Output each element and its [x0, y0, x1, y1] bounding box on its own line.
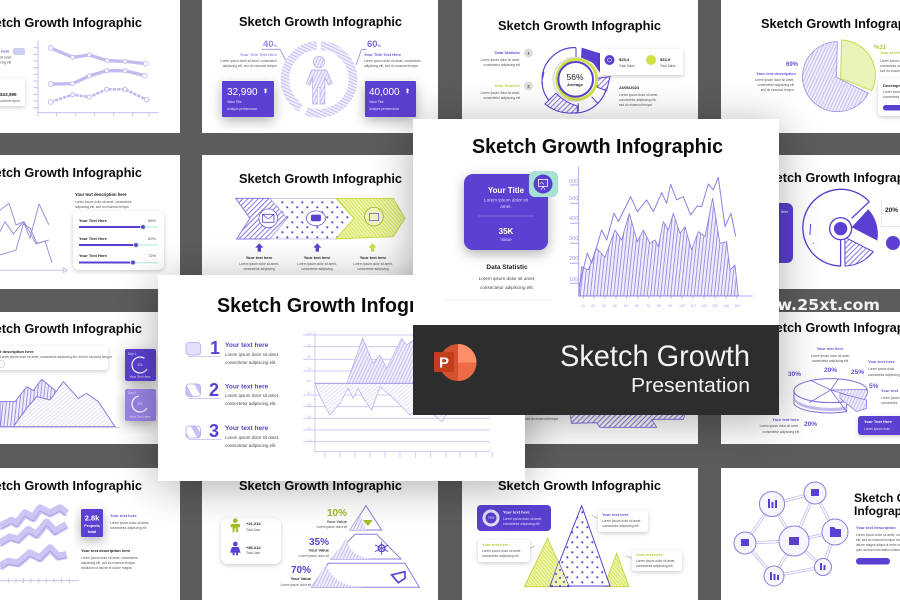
user card: +86,214: [246, 545, 261, 550]
item 2: [186, 380, 279, 406]
icon: powerpoint logo: [434, 344, 476, 381]
slide: 3d pie: Lorem ipsum dolor sit amet: [811, 354, 849, 358]
projects card: total: [88, 529, 96, 534]
slide: arrow chevrons: consectetur adipiscing: [301, 267, 333, 271]
stat card: [464, 174, 548, 250]
callout left: [478, 540, 530, 562]
slide: multi line sliders: [0, 155, 180, 289]
slide: person donut: Sketch Growth Infographic: [239, 14, 402, 29]
wave band chart: [0, 508, 78, 583]
slide: hero chart: 200: [569, 256, 578, 262]
slide: 3d pie: Lorem ipsum dolor sit amet,: [760, 424, 799, 428]
slider card: Your Text Here: [79, 236, 108, 241]
slide: line chart top left: $33,999: [0, 92, 17, 97]
slide: wave bands: Your text description here: [81, 548, 131, 553]
slide: pie chart top right: %31: [874, 45, 887, 51]
slide: pie chart top right: sed do eiusmod tempor: [761, 88, 795, 92]
slide: triangles: Sketch Growth Infographic: [498, 478, 661, 493]
slide: person donut: 40%: [263, 39, 278, 50]
stat card left: [222, 81, 274, 117]
slide: stacked area overlay: 50: [307, 390, 312, 395]
sales card: $33,9: [660, 57, 671, 62]
slide: person donut: adipiscing elit, sed do eiusmod tempor: [223, 64, 278, 68]
slide: 3d pie: consectetur adipiscing elit: [762, 430, 799, 434]
mountain area chart: [0, 379, 119, 427]
slide: pie chart top right: Lorem ipsum dolor sit amet,: [755, 78, 794, 82]
slide: right side wedge pie: [721, 155, 900, 289]
slide: pyramid: Your Value: [291, 576, 312, 581]
projects card: Projects: [84, 523, 101, 528]
slide: pyramid: 35%: [309, 537, 329, 548]
slide: hero chart: 10: [581, 304, 585, 308]
slide: multi line sliders: Lorem ipsum dolor sit amet, consectetur: [75, 200, 133, 204]
item 2: Lorem ipsum dolor sit amet,: [225, 393, 279, 398]
slide: 3d pie: 20%: [804, 421, 817, 428]
slide: average donut: Lorem ipsum dolor sit amet,: [481, 58, 520, 62]
slide: hero chart: 130: [712, 304, 718, 308]
triangles chart: [524, 506, 632, 587]
day card 1: Day 1: [128, 352, 137, 356]
slide: hero chart: 70: [646, 304, 650, 308]
purple callout: Lorem ipsum dolor sit amet: [503, 517, 542, 521]
stat card right: Analyze performance: [369, 107, 399, 111]
slide: 3d pie: consectetur: [881, 401, 898, 405]
slide: hero chart: [413, 119, 779, 325]
slide: arrow chevrons: Sketch Growth Infographic: [239, 171, 402, 186]
slide: arrow chevrons: Your text here: [360, 255, 387, 260]
slide: pie chart top right: [721, 0, 900, 133]
slide: hero chart: Data Statistic: [486, 264, 528, 271]
stat card: amet.: [500, 204, 512, 209]
hero area chart: [570, 167, 753, 299]
slide: wave bands: consectetur adipiscing elit: [110, 526, 147, 530]
day card 1: [125, 349, 156, 381]
user card: Total User: [246, 528, 261, 532]
slide: average donut: Sketch Growth Infographic: [498, 18, 661, 33]
slide: arrow chevrons: Your text here: [246, 255, 273, 260]
slide: hero chart: 600: [569, 179, 578, 185]
slide: average donut: 23/06/2024: [619, 85, 640, 90]
item 1: consectetur adipiscing elit.: [225, 360, 276, 365]
slide: 3d pie: Your text here: [772, 417, 800, 422]
stat card right: ⬆: [405, 88, 410, 95]
slide: stacked area overlay: 90: [307, 343, 312, 348]
slide: pie chart top right: 69%: [786, 62, 799, 68]
slide: average donut: Lorem ipsum dolor sit amet,: [619, 93, 658, 97]
slide: stacked area overlay: 100: [306, 331, 313, 336]
slide: line chart top left: [0, 0, 180, 133]
slide: wave bands: Your text here: [110, 513, 137, 518]
slide: hero chart: 120: [701, 304, 707, 308]
user card: +21,214: [246, 521, 261, 526]
item 1: Lorem ipsum dolor sit amet,: [225, 352, 279, 357]
slide: wave bands: Lorem ipsum dolor sit amet,: [110, 521, 149, 525]
day card 2: Your Text Here: [130, 415, 151, 419]
multi-line chart: [0, 203, 67, 273]
slide: 3d pie: Your text: [881, 388, 899, 393]
network diagram: [734, 482, 848, 586]
slide: average donut: consectetur adipiscing elit: [484, 63, 520, 67]
area chart: [303, 332, 492, 458]
slider card: 85%: [148, 218, 156, 223]
slide: wave bands: incididunt ut labore et dolore magna: [81, 566, 132, 570]
purple button card: Your Text Here: [864, 419, 893, 424]
slide: multi line sliders: adipiscing elit, sed do eiusmod tempor: [75, 205, 130, 209]
item 3: 3: [209, 421, 219, 441]
item 1: [186, 338, 279, 365]
slide: middle row hidden hatch chart: sed do eiusmod tempor: [525, 417, 559, 421]
slide: average donut: Average: [567, 82, 584, 87]
slide: arrow chevrons: Lorem ipsum dolor sit amet,: [353, 262, 393, 266]
slide: pie chart top right: consectetur adipiscing elit: [758, 83, 794, 87]
development card: [878, 78, 900, 116]
purple callout: Your text here: [503, 510, 530, 514]
sales card: Total Sales: [660, 64, 676, 68]
slider card: 60%: [148, 236, 156, 241]
band title: Sketch Growth: [560, 340, 750, 373]
slide: triangles: [462, 468, 698, 600]
slide: stacked area overlay: [158, 275, 525, 481]
stat card left: ⬆: [263, 88, 268, 95]
stat card right: 40,000: [369, 87, 400, 98]
callout left: consectetur adipiscing elit: [482, 554, 519, 558]
slide: right side wedge pie: 20%: [885, 207, 898, 214]
slide: hero chart: 30: [602, 304, 606, 308]
slide: average donut: [462, 0, 698, 133]
slide: 3d pie: Lorem ipsum: [881, 396, 900, 400]
callout right: Lorem ipsum dolor sit amet: [636, 559, 675, 563]
slide: 3d pie: Lorem ipsum dolor: [868, 367, 895, 371]
large title: Sketch Growth Infographic: [217, 295, 468, 317]
item 3: [186, 421, 279, 448]
slide: hero chart: 20: [591, 304, 595, 308]
slide: average donut: 1: [527, 50, 530, 56]
purple button card: Lorem ipsum dolor: [864, 427, 891, 431]
item 3: consectetur adipiscing elit.: [225, 443, 276, 448]
slide: average donut: consectetur adipiscing elit,: [619, 98, 656, 102]
slide: pyramid: 10%: [327, 508, 347, 519]
slide: arrow chevrons: Lorem ipsum dolor sit amet,: [297, 262, 337, 266]
wedge pie chart: [803, 189, 900, 266]
slide: average donut: sed do eiusmod tempor: [619, 103, 653, 107]
slide: 3d pie: Your text here: [868, 359, 895, 364]
item 2: 2: [209, 380, 219, 400]
slide: hero chart: 50: [624, 304, 628, 308]
slide: 3d pie: Your text here: [817, 346, 844, 351]
slide: hero chart: Lorem ipsum dolor sit amet,: [479, 276, 535, 281]
slide: hero chart: 80: [657, 304, 661, 308]
slide: stacked area overlay: 80: [307, 354, 312, 359]
person donut chart: [262, 45, 367, 113]
slide: multi line sliders: Your text description here: [75, 192, 127, 197]
slide: arrow chevrons: consectetur adipiscing: [243, 267, 275, 271]
slide: hero chart: 40: [613, 304, 617, 308]
slide: wave bands: adipiscing elit, sed do eiusmod tempor: [81, 561, 136, 565]
slide: person donut: Your Title Text Here: [364, 52, 402, 57]
stat card: 35K: [499, 227, 514, 236]
callout top right: Lorem ipsum dolor sit amet: [602, 519, 641, 523]
line chart: [33, 41, 158, 116]
stat card left: 32,990: [227, 87, 258, 98]
item 2: consectetur adipiscing elit.: [225, 401, 276, 406]
description card: Lorem ipsum dolor sit amet, consectetur adipiscing elit, sed do eiusmod tempor: [0, 355, 113, 359]
callout right: [632, 550, 682, 571]
day card 2: 30k: [137, 402, 143, 406]
slide: person donut: Lorem ipsum dolor sit amet, consectetur: [364, 59, 422, 63]
stat card left: Analyze performance: [227, 107, 257, 111]
slide: right side wedge pie: Here: [781, 210, 788, 214]
slide: stacked area overlay: 60: [307, 378, 312, 383]
slide: 3d pie: 30%: [788, 371, 801, 378]
pie chart: [803, 40, 875, 112]
item 3: Your text here: [225, 425, 269, 432]
slide: 3d pie: 25%: [851, 369, 864, 376]
3d pie chart: [794, 379, 867, 413]
slide: hero chart: 400: [569, 216, 578, 222]
user card: [221, 518, 281, 564]
stat card left: Value Title: [227, 100, 242, 104]
sales card: $25,4: [619, 57, 630, 62]
slide: arrow chevrons: [202, 155, 438, 289]
callout left: Your text here: [482, 542, 509, 547]
description card: t description here: [0, 349, 34, 354]
slide: pyramid: [202, 468, 438, 600]
user card: Total User: [246, 551, 261, 555]
slide: hero chart: 100: [679, 304, 685, 308]
slide: hero chart: 150: [734, 304, 740, 308]
slide: person donut: adipiscing elit, sed do eiusmod tempor: [364, 64, 419, 68]
stat card right: [365, 81, 416, 117]
callout top right: [598, 510, 648, 532]
item 1: Your text here: [225, 342, 269, 349]
slide: hero chart: 110: [690, 304, 696, 308]
slide: hero chart: 100: [569, 277, 578, 283]
slide: 3d pie: consectetur adipiscing elit: [812, 359, 848, 363]
slide: average donut: Data Statistic: [495, 83, 521, 88]
slide: pyramid: Your Value: [327, 519, 348, 524]
stat card: Lorem ipsum dolor sit: [484, 198, 529, 202]
slide: mountain area and day cards: [0, 312, 180, 444]
slide: hero chart: 140: [723, 304, 729, 308]
day card 2: [125, 389, 156, 421]
slide: stacked area overlay: 40: [307, 402, 312, 407]
slide: stacked area overlay: 20: [307, 426, 312, 431]
shadow under overlay slides: [158, 125, 779, 487]
title band: [413, 325, 779, 415]
slide: network: [721, 468, 900, 600]
slide: person donut: 60%: [367, 39, 382, 50]
slide: arrow chevrons: Lorem ipsum dolor sit amet,: [239, 262, 279, 266]
slide: hero chart: 90: [668, 304, 672, 308]
slide: arrow chevrons: consectetur adipiscing: [357, 267, 389, 271]
stat card: Value: [500, 237, 512, 242]
slide: pyramid: 70%: [291, 565, 311, 576]
slide: hero chart: 60: [635, 304, 639, 308]
slide: stacked area overlay: 10: [307, 438, 312, 443]
slide: person donut: Your Title Text Here: [240, 52, 278, 57]
slide: hero chart: 300: [569, 236, 578, 242]
icon: powerpoint logo: P: [439, 354, 449, 372]
callout right: Your text here: [636, 552, 663, 557]
day card 2: Day 2: [128, 391, 137, 395]
projects card: 2.8k: [85, 514, 100, 522]
slide: average donut: 56%: [566, 72, 584, 82]
callout right: consectetur adipiscing elit: [636, 564, 673, 568]
slide: arrow chevrons: Your text here: [304, 255, 331, 260]
slide: 3d pie: 20%: [824, 367, 837, 374]
day card 1: Your Text Here: [130, 375, 151, 379]
slide: hero chart: consectetur adipiscing elit.: [480, 285, 534, 290]
day card 1: 32k: [137, 363, 143, 367]
pyramid chart: [312, 506, 419, 587]
slide: hero chart: 500: [569, 196, 578, 202]
slide: average donut: consectetur adipiscing elit: [484, 96, 520, 100]
slide: 3d pie: [721, 312, 900, 444]
hero title: Sketch Growth Infographic: [472, 136, 723, 158]
slide: pyramid: Lorem ipsum dolor sit: [281, 583, 311, 587]
slide: average donut: Data Statistic: [495, 50, 521, 55]
purple callout: 75%: [488, 516, 494, 520]
slide: wave bands: [0, 468, 180, 600]
icon: presentation badge: [529, 171, 558, 197]
slide: stacked area overlay: 30: [307, 414, 312, 419]
slide: pyramid: Your Value: [309, 548, 330, 552]
slide: stacked area overlay: 70: [307, 366, 312, 371]
callout left: Lorem ipsum dolor sit amet: [482, 549, 521, 553]
slide: 3d pie: consectetur adipiscing: [868, 373, 900, 377]
slide: network: Your text description: [856, 525, 896, 530]
slider card: 72%: [148, 253, 156, 258]
slider card: Your Text Here: [79, 253, 108, 258]
stat card: Your Title: [488, 186, 525, 195]
item 1: 1: [210, 338, 220, 358]
donut chart: [542, 48, 610, 113]
slide: pyramid: Lorem ipsum dolor sit: [317, 525, 347, 529]
sales card: Total Sales: [619, 64, 635, 68]
purple button card: [858, 416, 900, 435]
slide: average donut: 2: [527, 84, 530, 88]
slide: middle row hidden hatch chart: [462, 312, 698, 444]
slide: pie chart top right: Your text description: [756, 71, 797, 76]
purple callout: consectetur adipiscing elit: [503, 522, 540, 526]
callout top right: consectetur adipiscing elit: [602, 524, 639, 528]
slide: 3d pie: 5%: [869, 383, 879, 390]
slide: person donut: [202, 0, 438, 133]
item 2: Your text here: [225, 384, 269, 390]
watermark: www.25xt.com: [748, 296, 880, 314]
description card: [0, 346, 113, 370]
slider card: Your Text Here: [79, 218, 108, 223]
chevron arrows: [236, 198, 405, 252]
projects card: [81, 509, 103, 537]
slide: person donut: Lorem ipsum dolor sit amet, consectetur: [220, 59, 278, 63]
item 3: Lorem ipsum dolor sit amet,: [225, 435, 279, 440]
sales card: [600, 49, 683, 75]
stat card right: Value Title: [369, 100, 384, 104]
slide: pyramid: Sketch Growth Infographic: [239, 478, 402, 493]
slide: pyramid: Lorem ipsum dolor sit: [299, 554, 329, 558]
slider card: [73, 211, 164, 270]
slide: wave bands: Lorem ipsum dolor sit amet, consectetur: [81, 556, 139, 560]
band subtitle: Presentation: [631, 375, 750, 397]
purple callout: [477, 505, 551, 531]
callout top right: Your text here: [602, 512, 629, 517]
slide: average donut: Lorem ipsum dolor sit amet,: [481, 91, 520, 95]
